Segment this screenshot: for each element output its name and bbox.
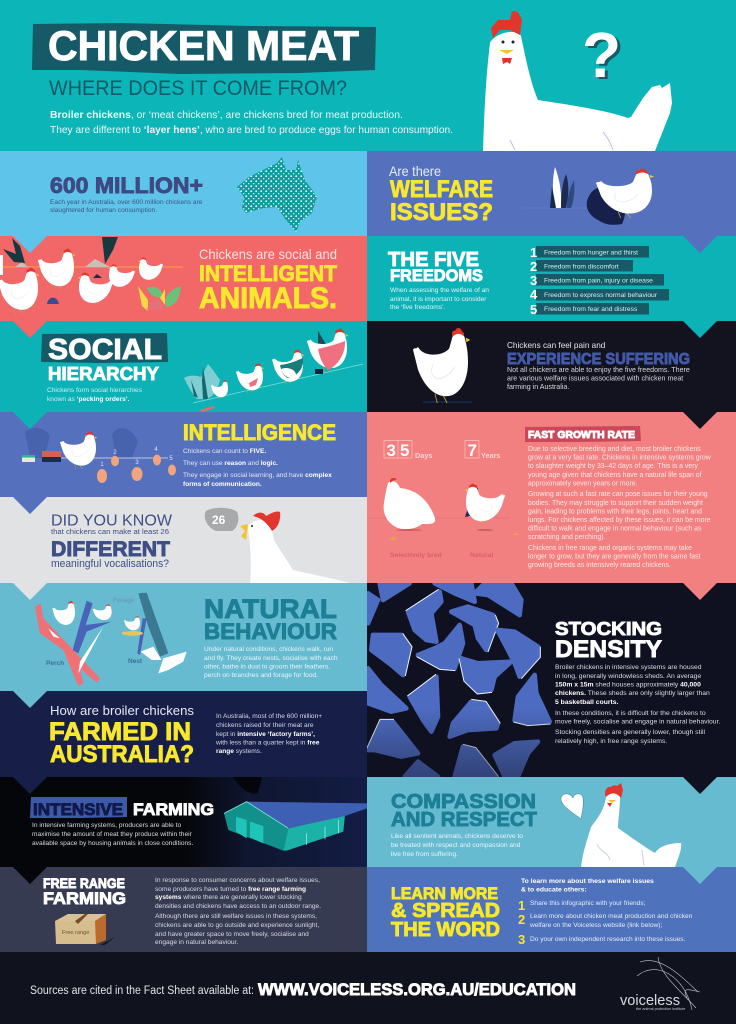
text: available space by housing animals in close conditions. bbox=[32, 840, 193, 847]
list of freedoms: Freedom from hunger and thirst bbox=[544, 250, 638, 256]
illustration: branches, hens, feathers bbox=[35, 593, 187, 686]
panel: learn more bbox=[367, 867, 736, 952]
text: Broiler chickens in intensive systems are housed bbox=[555, 664, 702, 671]
intro text: Broiler chickens, or ‘meat chickens’, are chickens bred for meat production. bbox=[50, 110, 403, 121]
text: known as ‘pecking orders’. bbox=[47, 396, 129, 403]
speech cloud bbox=[205, 508, 238, 531]
decorative scene bbox=[0, 237, 183, 314]
icon: Australia map bbox=[237, 157, 317, 232]
text: Chickens can count to FIVE. bbox=[183, 448, 266, 455]
text: In Australia, most of the 600 million+ bbox=[216, 713, 322, 720]
logo: the animal protection institute bbox=[636, 1007, 685, 1011]
selectively bred and natural hens bbox=[367, 478, 518, 559]
heading bbox=[204, 594, 337, 644]
counting scene: 4 bbox=[154, 447, 158, 453]
text: Are there bbox=[389, 163, 441, 179]
intro text: They are different to ‘layer hens’, who are bred to produce eggs for human consumption. bbox=[50, 125, 458, 136]
heading: FREE RANGE bbox=[43, 875, 125, 891]
panel: welfare issues bbox=[367, 151, 736, 236]
heading banner bbox=[525, 426, 641, 442]
text: Stocking densities are generally lower, though still bbox=[555, 729, 705, 736]
text: In these conditions, it is difficult for the chickens to bbox=[555, 710, 706, 717]
text: maximise the amount of meat they produce within their bbox=[32, 831, 193, 838]
section arrows bbox=[13, 236, 717, 884]
heading: DID YOU KNOW bbox=[51, 512, 172, 530]
text: To learn more about these welfare issues bbox=[521, 878, 654, 885]
text: that chickens can make at least 26 bbox=[51, 527, 169, 536]
logo bbox=[620, 957, 700, 1011]
heading: DENSITY bbox=[555, 636, 662, 663]
panel: natural behaviour bbox=[0, 583, 367, 691]
heading: STOCKING bbox=[555, 619, 662, 639]
text: chickens. These sheds are only slightly larger than bbox=[555, 690, 710, 697]
text: slaughtered for human consumption. bbox=[50, 207, 157, 214]
heading bbox=[390, 176, 493, 226]
heading bbox=[33, 800, 214, 819]
icon: heart bbox=[561, 794, 583, 819]
heading bbox=[49, 718, 194, 768]
list of freedoms: 1 bbox=[530, 245, 537, 260]
text: bodies. They may struggle to support their sudden weight bbox=[528, 500, 703, 507]
panel: social hierarchy bbox=[0, 321, 367, 412]
heading: EXPERIENCE SUFFERING bbox=[507, 351, 690, 368]
heading: WELFARE bbox=[390, 176, 493, 203]
text: When assessing the welfare of an bbox=[390, 287, 489, 294]
heading bbox=[555, 619, 662, 663]
speech cloud: 26 bbox=[212, 513, 226, 527]
text: 150m x 15m shed houses approximately 40,000 bbox=[555, 682, 701, 688]
text: longer to grow, but they are generally from the same fast bbox=[528, 554, 700, 560]
heading: NATURAL bbox=[204, 594, 337, 624]
text: Each year in Australia, over 600 million chickens are bbox=[50, 199, 203, 206]
selectively bred and natural hens: Natural bbox=[470, 552, 494, 559]
text: Chickens are social and bbox=[199, 246, 337, 262]
text: difficult to walk and engage in normal behaviour (such as bbox=[528, 526, 702, 532]
sources text: Sources are cited in the Fact Sheet available at: bbox=[30, 985, 254, 997]
text: move freely, socialise and engage in natural behaviour. bbox=[555, 718, 720, 726]
text: young age given that chickens have a natural life span of bbox=[528, 472, 702, 479]
heading: THE FIVE bbox=[388, 248, 479, 271]
panel: free range farming bbox=[0, 867, 367, 952]
text: live free from suffering. bbox=[391, 851, 458, 858]
panel: farmed in Australia bbox=[0, 691, 367, 777]
text: to slaughter weight by 33–42 days of age. This is a very bbox=[528, 463, 698, 470]
heading bbox=[199, 261, 337, 315]
text: and fly. They create nests, socialise with each bbox=[204, 655, 338, 662]
text: Like all sentient animals, chickens deserve to bbox=[391, 833, 523, 840]
heading: COMPASSION bbox=[391, 790, 536, 813]
text: farming in Australia. bbox=[507, 383, 569, 391]
counter: 35 days: 3 bbox=[386, 441, 396, 460]
counting scene: 2 bbox=[113, 450, 117, 456]
icon: barn bbox=[224, 802, 367, 851]
text: How are broiler chickens bbox=[50, 703, 194, 718]
icon: plant bbox=[521, 167, 587, 208]
heading: FARMING bbox=[133, 800, 214, 819]
heading: DIFFERENT bbox=[51, 538, 170, 561]
text: Under natural conditions, chickens walk, run bbox=[204, 646, 333, 653]
text: densities and chickens have access to an outdoor range. bbox=[155, 903, 321, 910]
text: forms of communication. bbox=[183, 481, 262, 488]
text: some producers have turned to free range farming bbox=[155, 886, 306, 893]
icon: hen bbox=[581, 783, 681, 867]
heading: HIERARCHY bbox=[48, 364, 159, 384]
list of freedoms: 4 bbox=[530, 287, 538, 302]
text: They engage in social learning, and have complex bbox=[183, 472, 332, 479]
counting scene bbox=[22, 428, 176, 483]
heading: FARMING bbox=[43, 889, 126, 908]
text: the ‘five freedoms’. bbox=[390, 304, 446, 311]
heading banner bbox=[41, 333, 168, 363]
panel: stocking density bbox=[366, 583, 736, 777]
heading bbox=[391, 790, 537, 831]
text: in long, generally windowless sheds. An average bbox=[555, 673, 701, 680]
text: perch on branches and forage for food. bbox=[204, 672, 318, 679]
text: lungs. For chickens affected by these issues, it can be more bbox=[528, 517, 711, 524]
numbered list bbox=[518, 898, 693, 947]
heading: INTELLIGENT bbox=[199, 261, 337, 286]
heading: THE WORD bbox=[391, 919, 500, 941]
list of freedoms: Freedom from discomfort bbox=[544, 264, 619, 270]
crowded hens bbox=[366, 583, 557, 777]
counting scene: 3 bbox=[135, 460, 139, 466]
panel: experience suffering bbox=[367, 321, 736, 412]
text: systems where there are generally lower stocking bbox=[155, 894, 302, 901]
heading bbox=[43, 875, 126, 908]
icon: question mark: ? bbox=[585, 21, 624, 93]
illustration: branches, hens, feathers: Nest bbox=[128, 658, 143, 665]
panel: compassion and respect bbox=[367, 777, 736, 867]
panel: fast growth rate bbox=[367, 412, 736, 583]
numbered list: Learn more about chicken meat production and chicken bbox=[530, 913, 693, 920]
text: animal, it is important to consider bbox=[390, 296, 487, 303]
heading bbox=[391, 884, 500, 941]
icon: hen head bbox=[240, 511, 350, 583]
text: Due to selective breeding and diet, most broiler chickens bbox=[528, 446, 701, 453]
numbered list: 2 bbox=[518, 912, 525, 927]
text: In intensive farming systems, producers are able to bbox=[32, 822, 181, 829]
text: meaningful vocalisations? bbox=[51, 558, 169, 570]
text: They can use reason and logic. bbox=[183, 460, 278, 467]
text: Not all chickens are able to enjoy the five freedoms. There bbox=[507, 366, 690, 374]
text: Chickens can feel pain and bbox=[507, 341, 606, 350]
text: other, bathe in dust to groom their feathers, bbox=[204, 664, 330, 670]
icon: hen with shadow bbox=[587, 169, 654, 225]
heading: AND RESPECT bbox=[391, 808, 537, 831]
heading: LEARN MORE bbox=[391, 884, 498, 903]
panel: five freedoms bbox=[367, 236, 736, 321]
hens in pecking order bbox=[184, 329, 363, 412]
subtitle: WHERE DOES IT COME FROM? bbox=[49, 77, 347, 100]
selectively bred and natural hens: Selectively bred bbox=[390, 552, 442, 559]
counter: 35 days: Years bbox=[481, 451, 500, 460]
header panel bbox=[0, 0, 736, 151]
text: with less than a quarter kept in free bbox=[216, 740, 319, 746]
list of freedoms: Freedom from fear and distress bbox=[544, 306, 638, 313]
text: grow at a very fast rate. Chickens in intensive systems grow bbox=[528, 454, 711, 462]
icon: cardboard box: Free range bbox=[62, 930, 89, 936]
numbered list: Do your own independent research into these issues. bbox=[530, 936, 686, 943]
text: range systems. bbox=[216, 748, 262, 755]
heading: ANIMALS. bbox=[199, 282, 337, 315]
heading: FARMED IN bbox=[49, 718, 191, 746]
heading: FREEDOMS bbox=[390, 266, 483, 285]
heading: & SPREAD bbox=[391, 900, 500, 922]
text: 5 basketball courts. bbox=[555, 699, 619, 706]
panel: intelligence bbox=[0, 412, 367, 497]
heading bbox=[48, 334, 162, 384]
heading: 600 MILLION+ bbox=[50, 173, 203, 198]
text: approximately seven years or more. bbox=[528, 480, 638, 488]
list of freedoms: 3 bbox=[530, 273, 537, 288]
text: chickens raised for their meat are bbox=[216, 722, 314, 729]
heading: ISSUES? bbox=[390, 199, 493, 226]
text: chickens are able to go outside and experience sunlight, bbox=[155, 922, 319, 929]
icon: large hen bbox=[483, 11, 672, 151]
list of freedoms: 2 bbox=[530, 259, 537, 274]
logo: voiceless bbox=[620, 992, 680, 1009]
website link: WWW.VOICELESS.ORG.AU/EDUCATION bbox=[258, 981, 576, 999]
text: be treated with respect and compassion and bbox=[391, 842, 521, 849]
numbered list: Share this infographic with your friends; bbox=[530, 900, 646, 907]
counter: 35 days: Days bbox=[415, 451, 432, 460]
text: & to educate others: bbox=[521, 886, 587, 894]
counter: 35 days: 7 bbox=[468, 441, 477, 460]
list of freedoms: Freedom to express normal behaviour bbox=[544, 292, 658, 299]
heading: SOCIAL bbox=[48, 334, 162, 366]
title: CHICKEN MEAT bbox=[48, 22, 359, 69]
numbered list: 3 bbox=[518, 932, 525, 947]
heading bbox=[388, 248, 483, 285]
list of freedoms: 5 bbox=[530, 302, 537, 317]
heading: BEHAVIOUR bbox=[204, 619, 337, 644]
text: kept in intensive ‘factory farms’, bbox=[216, 731, 315, 738]
text: Although there are still welfare issues in these systems, bbox=[155, 913, 317, 920]
list of freedoms bbox=[530, 245, 669, 317]
text: scratching and perching). bbox=[528, 534, 605, 541]
text: are various welfare issues associated with chicken meat bbox=[507, 374, 683, 382]
illustration: branches, hens, feathers: Perch bbox=[46, 660, 64, 667]
icon: question mark: ? bbox=[582, 19, 621, 91]
icon: cardboard box bbox=[55, 914, 115, 945]
panel: intensive farming bbox=[0, 777, 367, 867]
counter: 35 days bbox=[384, 440, 500, 460]
text: Growing at such a fast rate can pose issues for their young bbox=[528, 491, 708, 498]
text: and have greater space to move freely, socialise and bbox=[155, 931, 309, 938]
illustration: branches, hens, feathers: Forage bbox=[113, 597, 135, 604]
heading: INTENSIVE bbox=[33, 800, 123, 819]
title banner bbox=[32, 23, 376, 74]
panel: social and intelligent bbox=[0, 236, 367, 321]
heading: FAST GROWTH RATE bbox=[528, 429, 635, 441]
numbered list: welfare on the Voiceless website (link below); bbox=[529, 922, 662, 929]
heading highlight bbox=[30, 797, 127, 818]
list of freedoms: Freedom from pain, injury or disease bbox=[544, 278, 653, 284]
numbered list: 1 bbox=[518, 898, 525, 913]
counter: 35 days: 5 bbox=[400, 441, 409, 460]
text: In response to consumer concerns about welfare issues, bbox=[155, 877, 320, 884]
counting scene: 5 bbox=[169, 456, 173, 462]
footer bbox=[0, 952, 736, 1024]
text: engage in natural behaviour. bbox=[155, 939, 238, 946]
panel: did you know bbox=[0, 497, 367, 583]
icon: hen bbox=[413, 328, 472, 403]
text: relatively high, in free range systems. bbox=[555, 738, 667, 745]
text: Chickens form social hierarchies bbox=[47, 387, 143, 394]
heading: INTELLIGENCE bbox=[183, 420, 336, 445]
text: Chickens in free range and organic systems may take bbox=[528, 545, 692, 552]
text: gain, leading to problems with their legs, joints, heart and bbox=[528, 508, 702, 516]
counting scene: 1 bbox=[100, 462, 104, 468]
heading: AUSTRALIA? bbox=[50, 741, 194, 768]
text: growing breeds as intensively reared chickens. bbox=[528, 562, 671, 569]
panel: 600 million bbox=[0, 151, 367, 236]
